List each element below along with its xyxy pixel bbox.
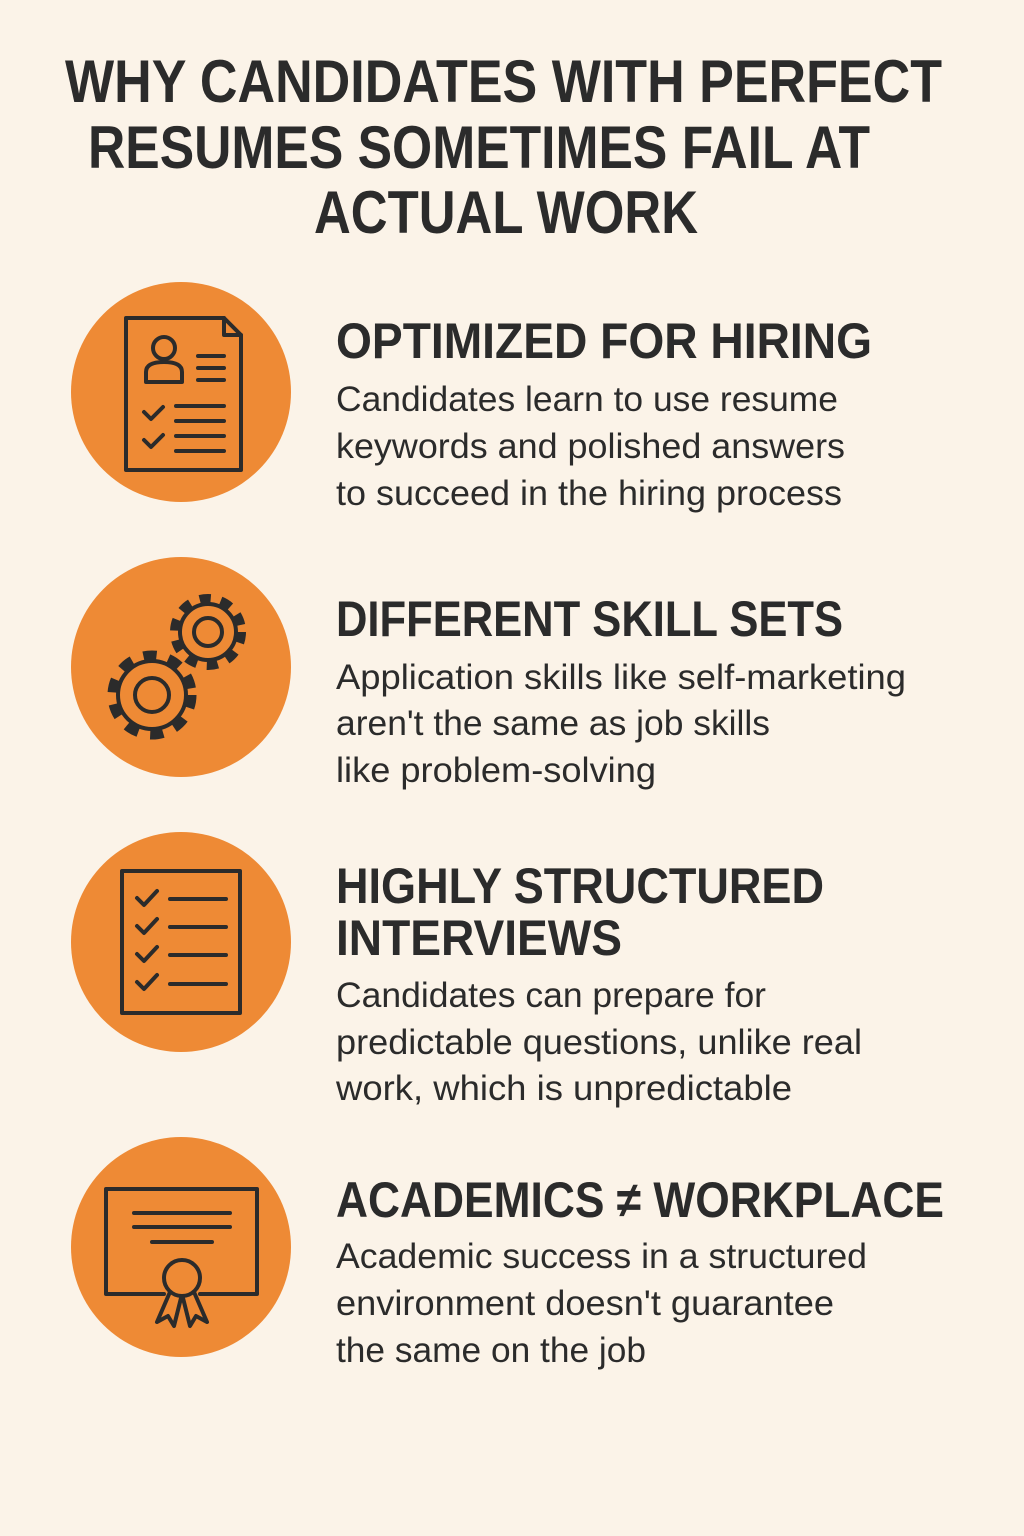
heading: DIFFERENT SKILL SETS (336, 591, 843, 647)
icon: certificate (71, 1137, 291, 1357)
title: ACTUAL WORK (314, 179, 698, 246)
body text: predictable questions, unlike real (336, 1023, 862, 1062)
title (65, 48, 942, 246)
body text: aren't the same as job skills (336, 704, 770, 743)
body text: work, which is unpredictable (335, 1069, 792, 1108)
panel: structured interviews (71, 832, 862, 1108)
body text: keywords and polished answers (336, 427, 845, 466)
body text: to succeed in the hiring process (336, 474, 842, 513)
body text: the same on the job (336, 1331, 646, 1370)
title: RESUMES SOMETIMES FAIL AT (88, 114, 870, 181)
icon: gears (71, 557, 291, 777)
panel: academics vs workplace (71, 1137, 944, 1370)
body text: Academic success in a structured (336, 1237, 867, 1276)
heading: INTERVIEWS (336, 910, 622, 966)
heading: HIGHLY STRUCTURED (336, 858, 824, 914)
body text (336, 380, 845, 513)
heading: ACADEMICS ≠ WORKPLACE (336, 1172, 944, 1228)
body text: like problem-solving (336, 751, 656, 790)
body text: Candidates can prepare for (336, 976, 766, 1015)
body text (336, 658, 906, 790)
body text (335, 976, 862, 1108)
body text: environment doesn't guarantee (336, 1284, 834, 1323)
heading (336, 858, 824, 966)
heading: OPTIMIZED FOR HIRING (336, 313, 872, 369)
icon: resume (71, 282, 291, 502)
panel: optimized for hiring (71, 282, 872, 513)
panel: different skill sets (71, 557, 906, 790)
icon: checklist (71, 832, 291, 1052)
body text: Application skills like self-marketing (336, 658, 906, 697)
body text: Candidates learn to use resume (336, 380, 838, 419)
body text (336, 1237, 867, 1370)
